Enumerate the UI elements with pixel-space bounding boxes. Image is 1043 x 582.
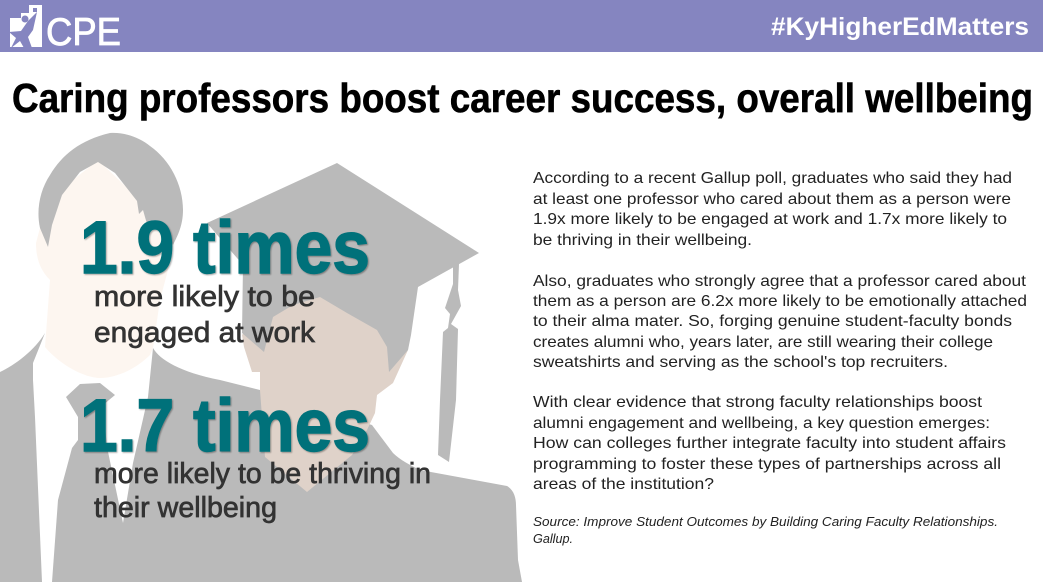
body paragraph 2: them as a person are 6.2x more likely to be emotionally attached xyxy=(533,293,1027,310)
stat caption: their wellbeing xyxy=(94,492,277,524)
body paragraph 2: to their alma mater. So, forging genuine student-faculty bonds xyxy=(533,313,1012,330)
tassel xyxy=(438,264,461,462)
illustration: professor and graduate silhouettes xyxy=(0,133,522,582)
body paragraph 2 xyxy=(533,273,1027,371)
body paragraph 2: creates alumni who, years later, are still wearing their college xyxy=(533,334,993,351)
stat: 1.7 times xyxy=(80,384,431,524)
man: hair xyxy=(38,133,183,247)
graduate: face and neck xyxy=(242,290,410,492)
stat: 1.9 times xyxy=(80,206,370,349)
graduate: mortarboard cap and hair xyxy=(207,163,479,372)
body paragraph 1: at least one professor who cared about them as a person were xyxy=(533,191,1011,208)
stat caption: more likely to be thriving in xyxy=(94,458,431,490)
source note xyxy=(533,514,998,546)
source note: Gallup. xyxy=(533,531,573,546)
source note: Source: Improve Student Outcomes by Building Caring Faculty Relationships. xyxy=(533,514,998,529)
man: suit left side xyxy=(0,333,45,582)
stat caption xyxy=(94,458,431,524)
body paragraph 3: programming to foster these types of partnerships across all xyxy=(533,456,1001,473)
stat caption xyxy=(94,281,316,349)
icon: CPE logo mark xyxy=(9,5,42,48)
stat caption: more likely to be xyxy=(94,281,315,313)
body paragraph 3: areas of the institution? xyxy=(533,476,714,493)
stat: 1.9 times: 1.9 times xyxy=(80,206,370,289)
body paragraph 3 xyxy=(533,394,1006,493)
body paragraph 1: be thriving in their wellbeing. xyxy=(533,232,752,249)
body paragraph 3: How can colleges further integrate faculty into student affairs xyxy=(533,435,1006,452)
body paragraph 1 xyxy=(533,170,1012,249)
header banner xyxy=(0,0,1043,54)
body paragraph 2: sweatshirts and serving as the school's top recruiters. xyxy=(533,354,948,371)
stat caption: engaged at work xyxy=(94,317,316,349)
logo wordmark: CPE xyxy=(46,11,121,54)
man: suit right side, tie and graduate's gown xyxy=(52,348,522,582)
body paragraph 1: According to a recent Gallup poll, graduates who said they had xyxy=(533,170,1012,187)
body paragraph 3: With clear evidence that strong faculty relationships boost xyxy=(533,394,983,411)
body paragraph 1: 1.9x more likely to be engaged at work and 1.7x more likely to xyxy=(533,211,1007,228)
body paragraph 3: alumni engagement and wellbeing, a key question emerges: xyxy=(533,415,990,432)
body paragraph 2: Also, graduates who strongly agree that a professor cared about xyxy=(533,273,1027,290)
hashtag: #KyHigherEdMatters xyxy=(771,13,1029,41)
stat: 1.7 times: 1.7 times xyxy=(80,384,370,467)
man: face and neck xyxy=(36,160,173,378)
